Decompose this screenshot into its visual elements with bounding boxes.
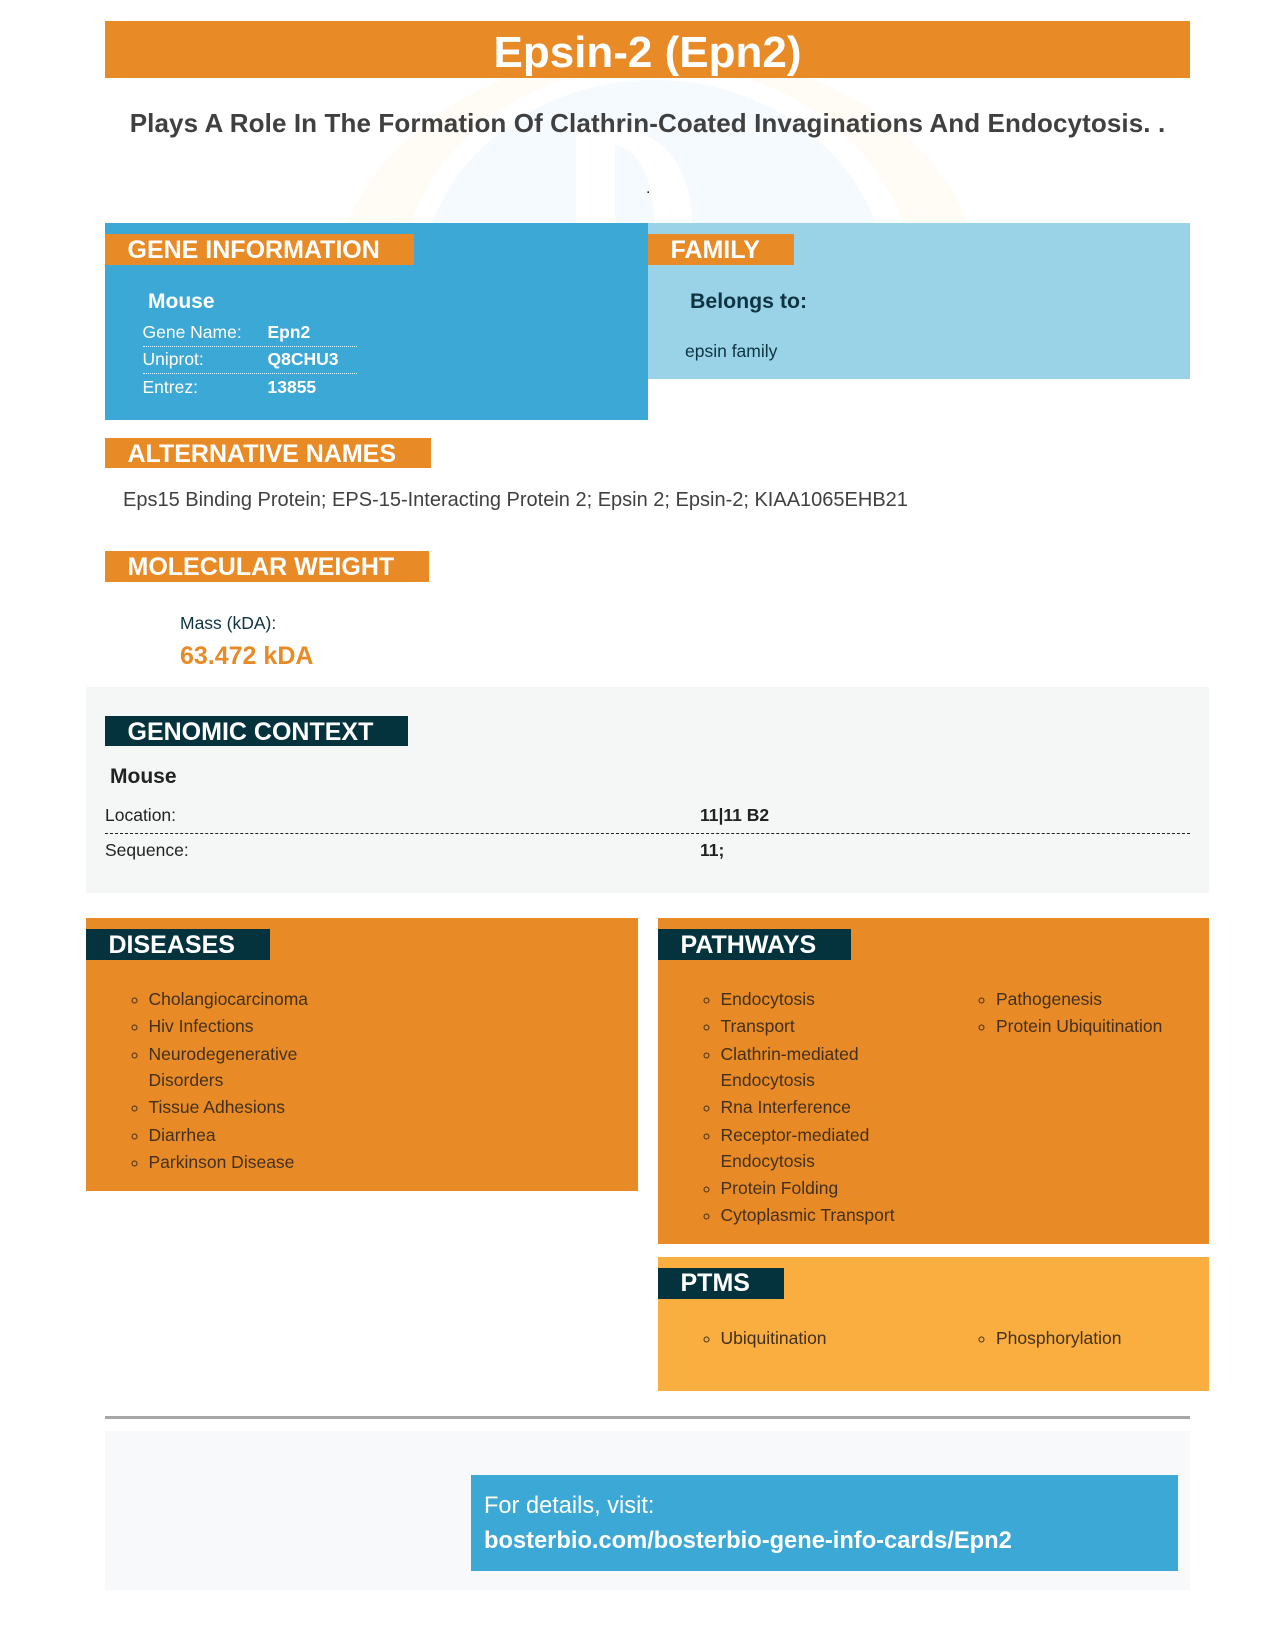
disease list: Parkinson Disease [148, 1152, 294, 1172]
pathway list column 2: Pathogenesis [996, 989, 1102, 1009]
panel: gene information [105, 223, 648, 420]
species label: Mouse [110, 765, 177, 788]
row: gene name [142, 319, 357, 347]
mass value: 63.472 kDA [180, 642, 313, 670]
heading: family [648, 234, 794, 265]
disease list [132, 989, 308, 1172]
panel: ptms [658, 1257, 1209, 1391]
row: uniprot [142, 346, 357, 374]
disease list: Diarrhea [148, 1125, 216, 1145]
panel: footer [105, 1431, 1190, 1590]
heading: family: FAMILY [670, 236, 760, 264]
watermark logo [348, 78, 968, 223]
row: gene name: Gene Name: [142, 322, 242, 342]
row: uniprot: Q8CHU3 [268, 349, 338, 369]
species label: Mouse [148, 290, 215, 313]
pathway list column 1: Clathrin-mediated [720, 1044, 859, 1064]
pathway list column 1: Endocytosis [720, 1070, 815, 1090]
belongs to label: Belongs to: [690, 289, 807, 313]
mass label: Mass (kDA): [180, 613, 276, 633]
heading: genomic context: GENOMIC CONTEXT [128, 718, 373, 746]
callout: details link [471, 1475, 1178, 1571]
panel: diseases [86, 918, 638, 1191]
title [105, 21, 1190, 78]
title: Epsin-2 (Epn2) [493, 28, 802, 77]
disease list: Hiv Infections [148, 1016, 254, 1036]
callout url: bosterbio.com/bosterbio-gene-info-cards/Epn2 [484, 1528, 1012, 1554]
disease list: Cholangiocarcinoma [148, 989, 308, 1009]
pathway list column 1: Transport [720, 1016, 795, 1036]
row: entrez: 13855 [268, 377, 316, 397]
disease list: Tissue Adhesions [148, 1097, 285, 1117]
heading: molecular weight: MOLECULAR WEIGHT [128, 553, 394, 581]
heading: diseases [86, 929, 270, 960]
row: entrez [142, 377, 316, 397]
disease list: Neurodegenerative [148, 1044, 297, 1064]
row: uniprot: Uniprot: [142, 349, 204, 369]
heading: pathways [658, 929, 851, 960]
pathway list column 1: Endocytosis [720, 989, 815, 1009]
pathway list column 1 [704, 989, 895, 1225]
subtitle: Plays A Role In The Formation Of Clathrin-Coated Invaginations And Endocytosis. . [130, 108, 1165, 138]
alternative names text: Eps15 Binding Protein; EPS-15-Interacting Protein 2; Epsin 2; Epsin-2; KIAA1065EHB21 [123, 489, 908, 511]
row: location: Location: [105, 805, 176, 825]
panel: pathways [658, 918, 1209, 1244]
pathway list column 2 [978, 989, 1162, 1036]
panel: genomic context [86, 687, 1209, 893]
pathway list column 2: Protein Ubiquitination [996, 1016, 1162, 1036]
callout label: For details, visit: [484, 1493, 654, 1519]
row: sequence [105, 840, 724, 860]
heading: alternative names: ALTERNATIVE NAMES [128, 440, 396, 468]
panel: family [648, 223, 1190, 379]
pathway list column 1: Cytoplasmic Transport [720, 1205, 895, 1225]
stray dot: . [646, 180, 650, 197]
row: entrez: Entrez: [142, 377, 198, 397]
heading: gene information: GENE INFORMATION [128, 236, 380, 264]
row: gene name: Epn2 [268, 322, 310, 342]
ptm list column 2: Phosphorylation [996, 1328, 1122, 1348]
pathway list column 1: Endocytosis [720, 1151, 815, 1171]
row: location [105, 802, 1190, 834]
heading: ptms: PTMS [680, 1269, 750, 1297]
pathway list column 1: Protein Folding [720, 1178, 838, 1198]
row: sequence: Sequence: [105, 840, 189, 860]
family value: epsin family [685, 341, 777, 361]
disease list: Disorders [148, 1070, 223, 1090]
ptm list column 1: Ubiquitination [720, 1328, 827, 1348]
heading: diseases: DISEASES [108, 931, 235, 959]
pathway list column 1: Receptor-mediated [720, 1125, 869, 1145]
heading: pathways: PATHWAYS [680, 931, 816, 959]
heading: ptms [658, 1268, 784, 1299]
row: location: 11|11 B2 [700, 805, 769, 825]
pathway list column 1: Rna Interference [720, 1097, 851, 1117]
row: sequence: 11; [700, 840, 724, 860]
